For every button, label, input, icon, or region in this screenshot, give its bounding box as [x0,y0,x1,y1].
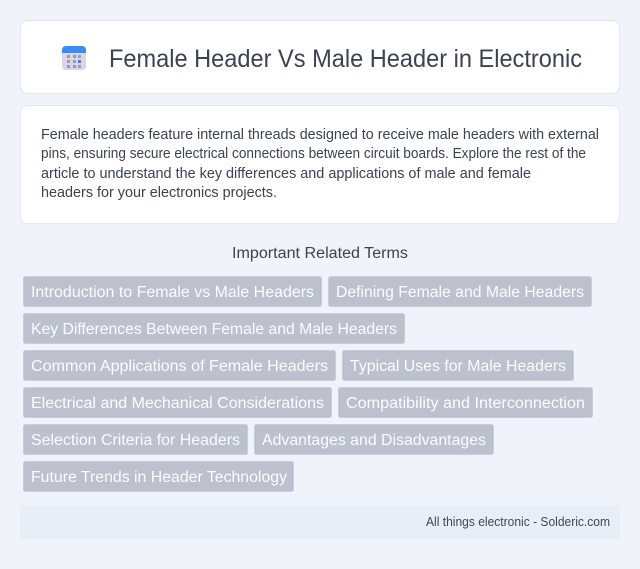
heading: important related terms: Important Related Terms [232,245,408,262]
tag: Key Differences Between Female and Male Headers [31,321,397,338]
tag: Typical Uses for Male Headers [350,358,566,375]
tag: Electrical and Mechanical Considerations [31,395,324,412]
tag: Advantages and Disadvantages [262,432,486,449]
tag [24,276,322,306]
panel: title header [20,20,620,94]
tag [24,314,404,344]
tag [338,388,592,418]
text block: description: headers for your electronics projects. [41,185,277,201]
text block: description: Female headers feature internal threads designed to receive male headers with external [41,127,599,143]
tag [24,350,336,380]
tag: Defining Female and Male Headers [336,284,584,301]
tag: Compatibility and Interconnection [346,395,585,412]
tag [24,462,294,492]
text block: description: article to understand the key differences and applications of male and female [41,166,531,182]
tag [254,424,494,454]
tag [342,350,574,380]
tag list [24,276,592,492]
tag [24,388,332,418]
panel: description [20,106,620,224]
tag: Common Applications of Female Headers [31,358,328,375]
tag: Future Trends in Header Technology [31,469,287,486]
tag: Selection Criteria for Headers [31,432,240,449]
text block: description: pins, ensuring secure electrical connections between circuit boards. Explore the rest of the [41,146,586,162]
footer [20,505,620,539]
title: Female Header Vs Male Header in Electronic [109,45,582,73]
icon: calendar [62,46,86,70]
tag [24,424,248,454]
text block: description [41,127,599,201]
tag: Introduction to Female vs Male Headers [31,284,314,301]
footer: All things electronic - Solderic.com [426,515,610,529]
tag [328,276,592,306]
